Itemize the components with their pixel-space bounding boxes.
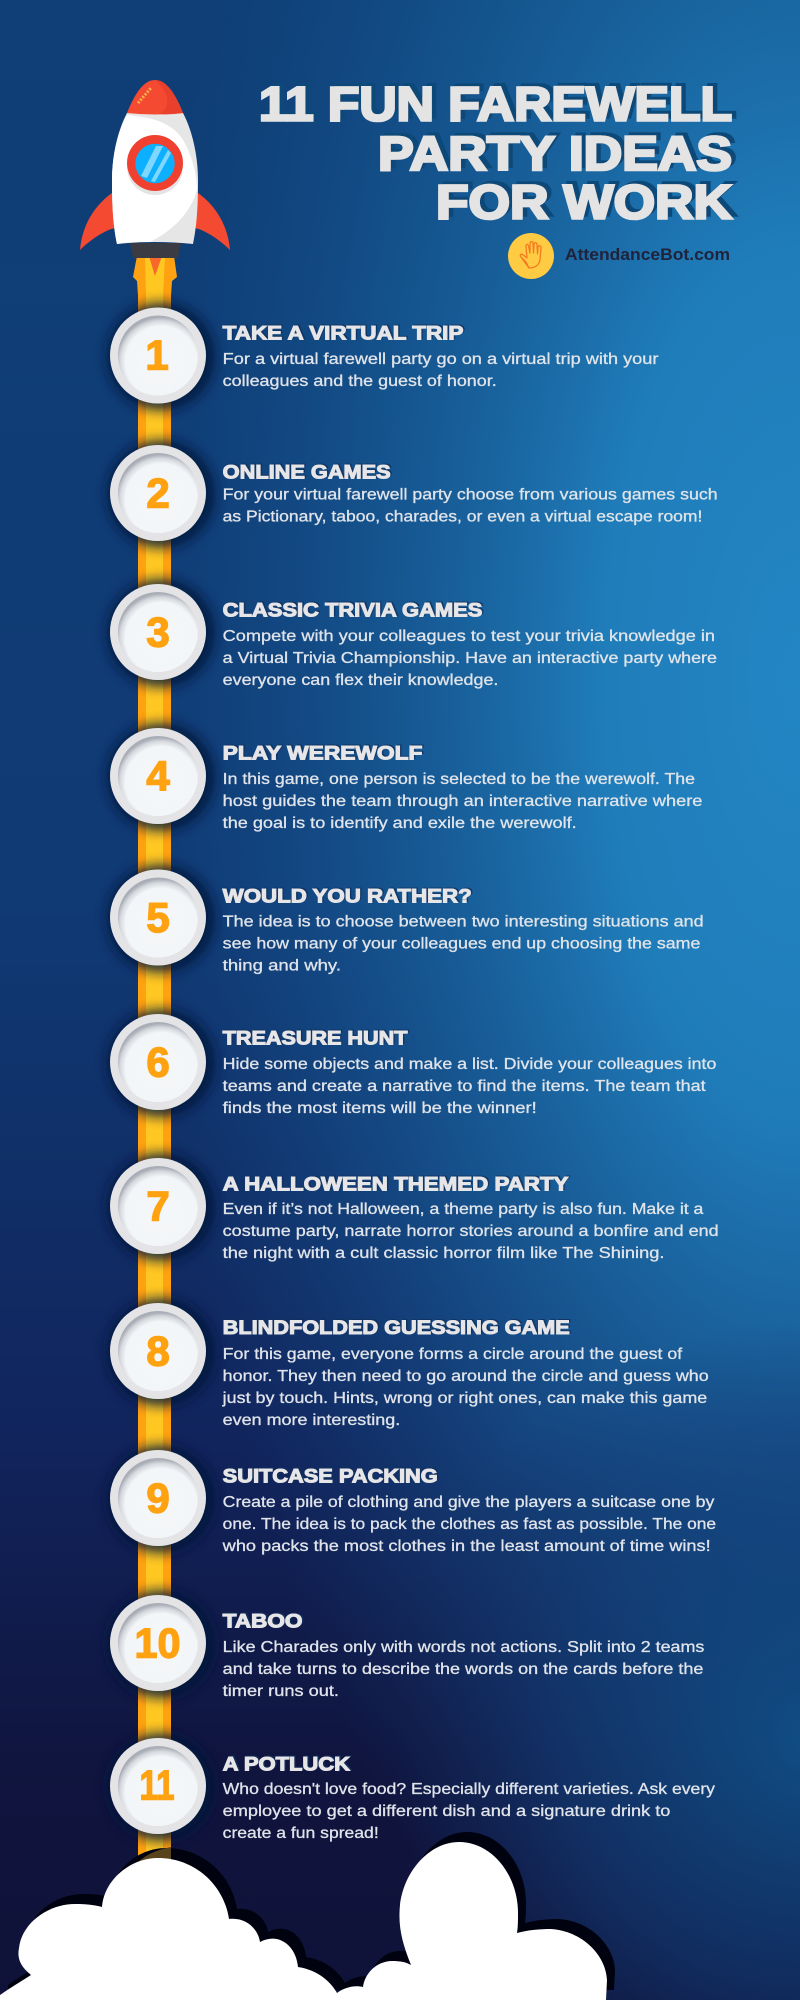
text 5 (223, 913, 704, 974)
number badge 7 (107, 1153, 215, 1261)
text 11: create a fun spread! (223, 1825, 379, 1842)
number badge 2 (107, 440, 215, 548)
number badge 7: 7 (146, 1182, 170, 1230)
text 5: see how many of your colleagues end up choosing the same (223, 935, 701, 952)
heading 4: PLAY WEREWOLF (223, 743, 422, 765)
strip seen through cloud shadow (138, 1847, 171, 1862)
step 9 (107, 1445, 716, 1555)
logo: AttendanceBot (508, 233, 730, 279)
text 7 (223, 1201, 719, 1262)
text 8: For this game, everyone forms a circle around the guest of (223, 1346, 683, 1363)
number badge 4 (107, 723, 215, 831)
text 10: and take turns to describe the words on the cards before the (223, 1661, 704, 1678)
heading 6: TREASURE HUNT (223, 1028, 407, 1050)
text 10: timer runs out. (223, 1683, 339, 1700)
icon: rocket (80, 80, 230, 296)
cloud shadow (8, 1832, 615, 1990)
text 6 (223, 1056, 717, 1117)
text 6: teams and create a narrative to find the items. The team that (223, 1078, 706, 1095)
text 8: even more interesting. (223, 1412, 400, 1429)
flame trail strip (138, 265, 171, 1865)
logo: AttendanceBot: AttendanceBot.com (565, 245, 730, 264)
number badge 3 (107, 579, 215, 687)
text 1 (223, 351, 659, 390)
text 7: Even if it’s not Halloween, a theme party is also fun. Make it a (223, 1201, 704, 1218)
number badge 2: 2 (146, 470, 170, 516)
text 9: who packs the most clothes in the least amount of time wins! (222, 1538, 711, 1555)
icon: hand (508, 233, 554, 279)
text 8: just by touch. Hints, wrong or right ones, can make this game (222, 1390, 707, 1407)
text 11: employee to get a different dish and a signature drink to (223, 1803, 671, 1820)
number badge 6 (107, 1009, 215, 1117)
text 10 (223, 1639, 704, 1700)
step 10 (107, 1590, 704, 1700)
number badge 5: 5 (146, 894, 170, 941)
text 4: In this game, one person is selected to be the werewolf. The (223, 771, 695, 788)
title: FOR WORK (436, 177, 732, 230)
heading 9: SUITCASE PACKING (223, 1466, 438, 1488)
heading 3: CLASSIC TRIVIA GAMES (223, 599, 482, 621)
number badge 10 (107, 1590, 215, 1698)
heading 2: ONLINE GAMES (223, 461, 391, 483)
number badge 11: 11 (140, 1762, 174, 1808)
text 8: honor. They then need to go around the circle and guess who (223, 1368, 709, 1385)
clouds (0, 1832, 615, 2000)
text 2 (223, 486, 718, 525)
text 3: everyone can flex their knowledge. (223, 672, 498, 689)
text 4 (223, 771, 703, 832)
text 6: Hide some objects and make a list. Divide your colleagues into (223, 1056, 717, 1073)
step 5 (107, 864, 704, 974)
step 7 (107, 1153, 719, 1262)
text 3: a Virtual Trivia Championship. Have an interactive party where (223, 650, 717, 667)
text 8 (222, 1346, 709, 1429)
flames (133, 256, 177, 296)
step 3 (107, 579, 717, 689)
text 7: the night with a cult classic horror film like The Shining. (223, 1245, 664, 1262)
step 6 (107, 1009, 717, 1117)
number badge 1 (107, 302, 215, 410)
title (259, 79, 732, 230)
text 9 (222, 1494, 716, 1555)
number badge 8: 8 (146, 1328, 170, 1374)
text 5: thing and why. (223, 957, 341, 974)
text 7: costume party, narrate horror stories around a bonfire and end (223, 1223, 719, 1240)
text 5: The idea is to choose between two interesting situations and (223, 913, 704, 930)
text 2: as Pictionary, taboo, charades, or even a virtual escape room! (223, 508, 702, 525)
window (127, 135, 183, 195)
text 9: Create a pile of clothing and give the players a suitcase one by (223, 1494, 714, 1511)
number badge 9: 9 (146, 1474, 170, 1522)
heading 11: A POTLUCK (223, 1754, 350, 1776)
text 4: the goal is to identify and exile the werewolf. (223, 815, 577, 832)
body (112, 113, 198, 244)
text 4: host guides the team through an interactive narrative where (223, 793, 703, 810)
number badge 6: 6 (146, 1038, 170, 1086)
text 11 (223, 1781, 715, 1842)
step 8 (107, 1298, 709, 1429)
number badge 4: 4 (146, 752, 170, 800)
heading 8: BLINDFOLDED GUESSING GAME (223, 1317, 570, 1339)
number badge 10: 10 (134, 1620, 180, 1666)
number badge 11 (107, 1733, 215, 1841)
number badge 1: 1 (145, 332, 169, 378)
step 2 (107, 440, 718, 548)
white cloud (0, 1842, 607, 2000)
text 11: Who doesn't love food? Especially different varieties. Ask every (223, 1781, 715, 1798)
text 10: Like Charades only with words not actions. Split into 2 teams (223, 1639, 704, 1656)
number badge 5 (107, 864, 215, 972)
right fin (195, 193, 230, 250)
heading 1: TAKE A VIRTUAL TRIP (223, 322, 463, 344)
engine (130, 243, 181, 258)
text 1: colleagues and the guest of honor. (223, 373, 497, 390)
number badge 3: 3 (146, 608, 170, 656)
step 11 (107, 1733, 715, 1842)
heading 7: A HALLOWEEN THEMED PARTY (223, 1174, 568, 1196)
heading 5: WOULD YOU RATHER? (223, 885, 472, 907)
text 9: one. The idea is to pack the clothes as fast as possible. The one (223, 1516, 716, 1533)
text 2: For your virtual farewell party choose from various games such (223, 486, 718, 503)
title: 11 FUN FAREWELL (259, 79, 732, 132)
heading 10: TABOO (223, 1610, 302, 1632)
text 3 (223, 628, 717, 689)
text 1: For a virtual farewell party go on a virtual trip with your (223, 351, 659, 368)
text 3: Compete with your colleagues to test your trivia knowledge in (223, 628, 715, 645)
left fin (80, 193, 115, 250)
nose cone (127, 80, 183, 114)
number badge 8 (107, 1298, 215, 1406)
title: PARTY IDEAS (378, 128, 732, 181)
number badge 9 (107, 1445, 215, 1553)
step 1 (107, 302, 659, 410)
step 4 (107, 723, 703, 832)
text 6: finds the most items will be the winner! (223, 1100, 537, 1117)
